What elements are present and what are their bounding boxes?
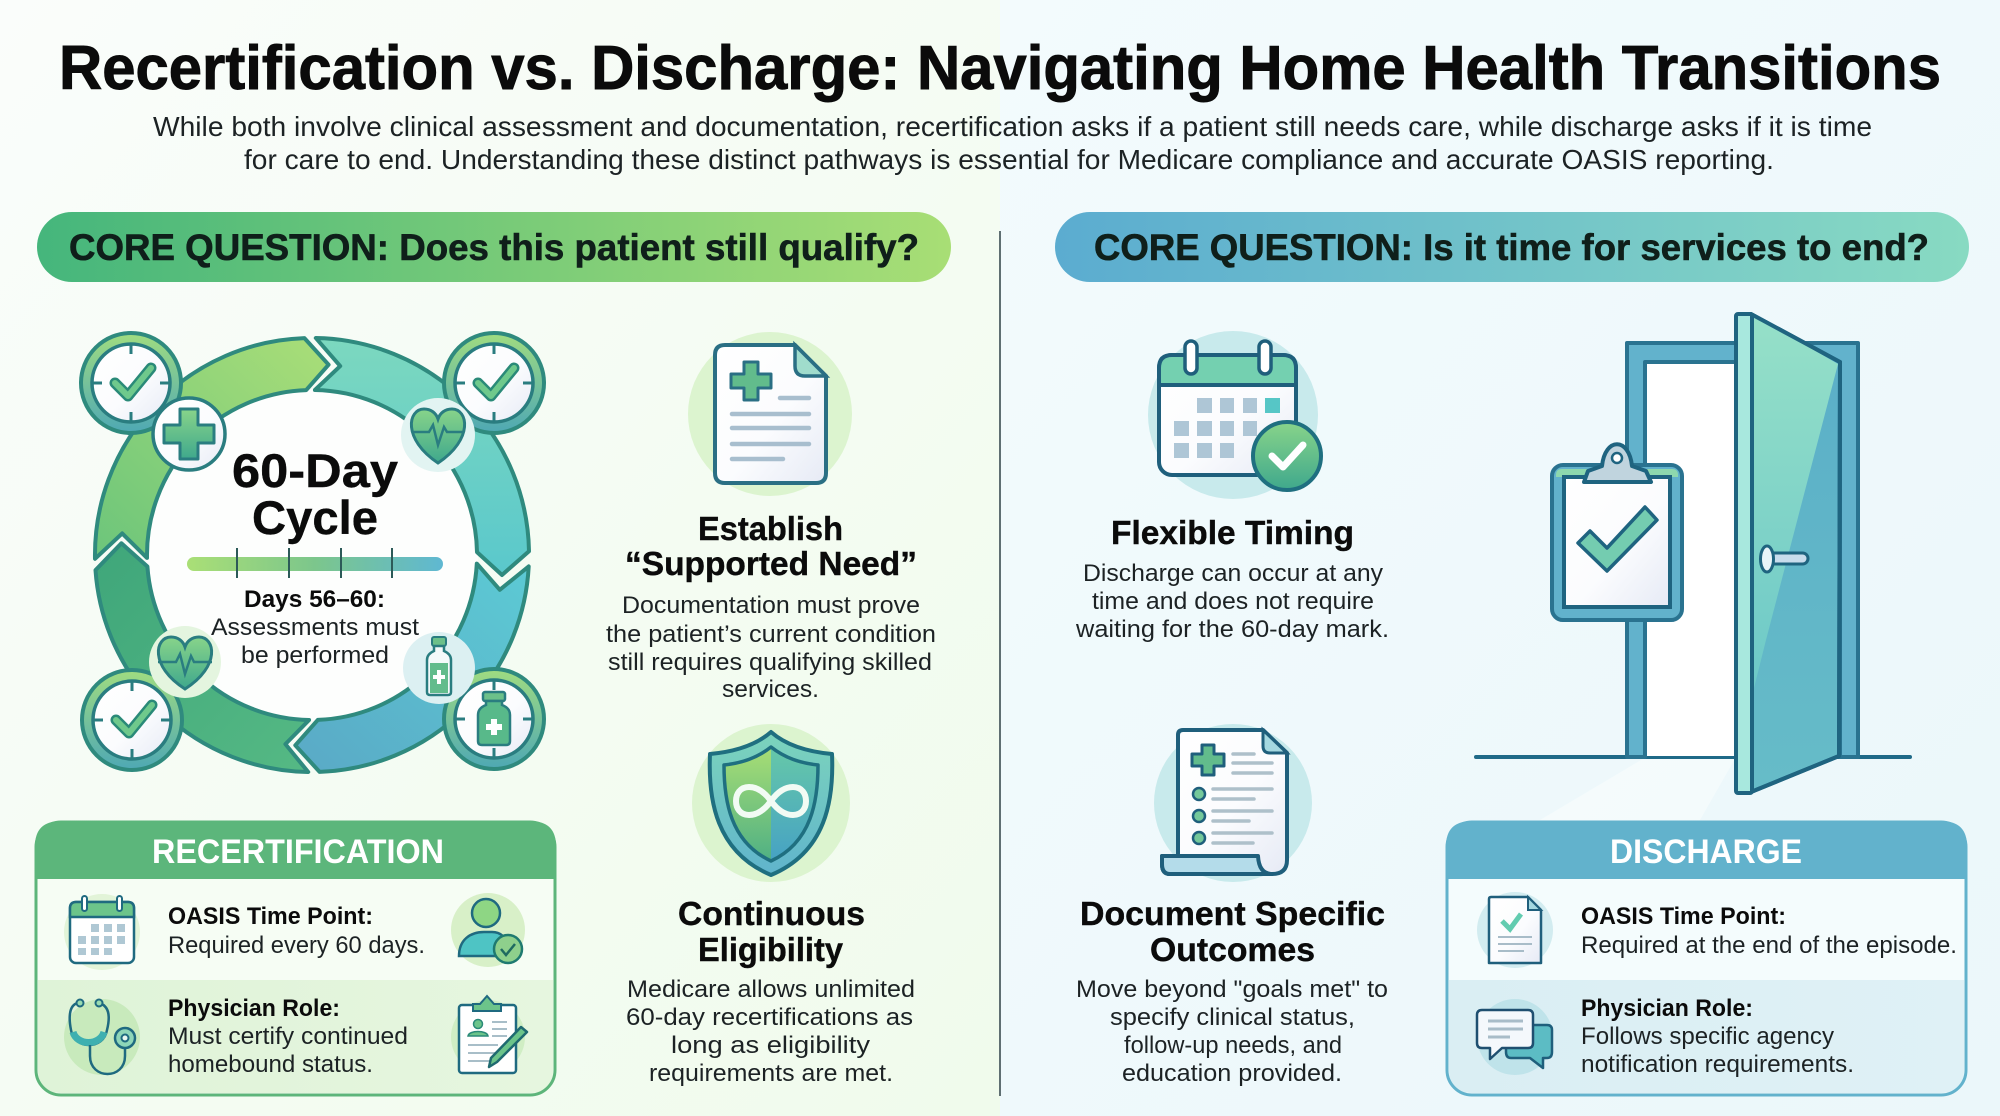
- days 56-60 note: [211, 586, 419, 669]
- oasis time point text: [168, 903, 425, 959]
- day timeline bar: [187, 548, 443, 578]
- icon: shield with infinity: [692, 724, 850, 882]
- panel body: [1447, 822, 1966, 1095]
- heading: Continuous: [678, 895, 865, 932]
- badge: medicine bottle: [403, 632, 475, 704]
- panel: discharge: [1446, 821, 1967, 1095]
- cycle heading: [232, 444, 398, 544]
- description: Move beyond "goals met" to: [1076, 976, 1388, 1003]
- badge: medical cross: [153, 398, 225, 470]
- description: long as eligibility: [671, 1032, 871, 1059]
- icon: outcome document: [1154, 724, 1312, 882]
- icon: medical document: [688, 332, 852, 496]
- days 56-60 note: be performed: [241, 642, 389, 669]
- heading: Eligibility: [698, 931, 844, 968]
- description: [1076, 976, 1388, 1087]
- description: Discharge can occur at any: [1083, 560, 1384, 587]
- panel header: [35, 821, 556, 879]
- title: Recertification vs. Discharge: Navigating Home Health Transitions: [59, 34, 1941, 103]
- heading: Document Specific: [1080, 895, 1385, 932]
- icon: calendar: [64, 894, 140, 970]
- background: discharge side: [1000, 0, 2000, 1116]
- feature: flexible timing: [1075, 331, 1389, 643]
- panel body: [36, 822, 555, 1095]
- physician role text: notification requirements.: [1581, 1051, 1854, 1078]
- description: still requires qualifying skilled: [608, 649, 932, 676]
- oasis time point text: OASIS Time Point:: [1581, 903, 1786, 930]
- heading: [678, 895, 865, 968]
- description: time and does not require: [1092, 588, 1374, 615]
- clipboard with check: [1552, 444, 1682, 620]
- clock: bottom left: [82, 670, 182, 770]
- days 56-60 note: Days 56–60:: [244, 586, 385, 613]
- description: [606, 592, 936, 703]
- badge: heart bottom left: [149, 626, 221, 698]
- description: Documentation must prove: [622, 592, 920, 619]
- description: [626, 976, 915, 1087]
- core question pill: recertification: CORE QUESTION: Does this patient still qualify?: [69, 227, 919, 268]
- icon: calendar with check: [1148, 331, 1321, 499]
- ring interior: [146, 389, 478, 721]
- description: requirements are met.: [649, 1060, 893, 1087]
- icon: person with check: [451, 893, 525, 967]
- physician role text: [1581, 995, 1854, 1078]
- physician role text: Physician Role:: [1581, 995, 1753, 1022]
- description: follow-up needs, and: [1124, 1032, 1342, 1059]
- feature: document specific outcomes: [1076, 724, 1388, 1087]
- description: services.: [722, 676, 819, 703]
- description: [1075, 560, 1389, 643]
- 60-day cycle diagram: [81, 333, 544, 772]
- cycle heading: Cycle: [252, 491, 378, 544]
- feature: establish supported need: [606, 332, 936, 703]
- description: the patient’s current condition: [606, 621, 936, 648]
- door: [1736, 314, 1840, 793]
- oasis time point text: [1581, 903, 1957, 959]
- intro text: [153, 111, 1872, 175]
- intro text: While both involve clinical assessment and documentation, recertification asks if a patient still needs care, while discharge asks if it is time: [153, 111, 1872, 142]
- physician role text: Follows specific agency: [1581, 1023, 1834, 1050]
- door handle: [1760, 546, 1808, 572]
- center divider: [999, 231, 1001, 1096]
- panel header: DISCHARGE: [1610, 833, 1802, 871]
- floor line: [1476, 755, 1910, 759]
- heading: Establish: [698, 510, 843, 547]
- physician role text: [168, 995, 408, 1078]
- description: waiting for the 60-day mark.: [1075, 616, 1389, 643]
- clock: top left: [81, 333, 181, 433]
- icon: chat bubbles: [1477, 999, 1553, 1075]
- badge: heart top right: [401, 398, 475, 472]
- physician role text: homebound status.: [168, 1051, 373, 1078]
- description: Medicare allows unlimited: [627, 976, 915, 1003]
- door frame: [1627, 343, 1858, 757]
- core question pill: recertification: [37, 212, 951, 282]
- clock: bottom right with bottle: [444, 669, 544, 769]
- icon: stethoscope: [64, 999, 140, 1075]
- floor light: [1540, 757, 1736, 820]
- cycle heading: 60-Day: [232, 444, 398, 497]
- core question pill: discharge: CORE QUESTION: Is it time for services to end?: [1094, 227, 1929, 268]
- feature: continuous eligibility: [626, 724, 915, 1087]
- description: specify clinical status,: [1110, 1004, 1355, 1031]
- panel header: [1446, 821, 1967, 879]
- heading: [1080, 895, 1385, 968]
- heading: [625, 510, 917, 582]
- oasis time point text: Required at the end of the episode.: [1581, 932, 1957, 959]
- oasis time point text: OASIS Time Point:: [168, 903, 373, 930]
- intro text: for care to end. Understanding these distinct pathways is essential for Medicare compliance and accurate OASIS reporting.: [244, 144, 1774, 175]
- icon: clipboard with pen: [451, 996, 527, 1074]
- background: recertification side: [0, 0, 1000, 1116]
- icon: checked document: [1477, 892, 1553, 968]
- days 56-60 note: Assessments must: [211, 614, 419, 641]
- clock: top right: [444, 333, 544, 433]
- physician role text: Must certify continued: [168, 1023, 408, 1050]
- core question pill: discharge: [1055, 212, 1969, 282]
- heading: Flexible Timing: [1111, 514, 1354, 551]
- description: education provided.: [1122, 1060, 1342, 1087]
- panel: recertification: [35, 821, 556, 1095]
- cycle arrows: [95, 338, 529, 772]
- panel header: RECERTIFICATION: [152, 833, 444, 871]
- illustration: open door with clipboard: [1476, 314, 1910, 820]
- heading: Outcomes: [1150, 931, 1315, 968]
- physician role text: Physician Role:: [168, 995, 340, 1022]
- oasis time point text: Required every 60 days.: [168, 932, 425, 959]
- heading: “Supported Need”: [625, 545, 917, 582]
- description: 60-day recertifications as: [626, 1004, 913, 1031]
